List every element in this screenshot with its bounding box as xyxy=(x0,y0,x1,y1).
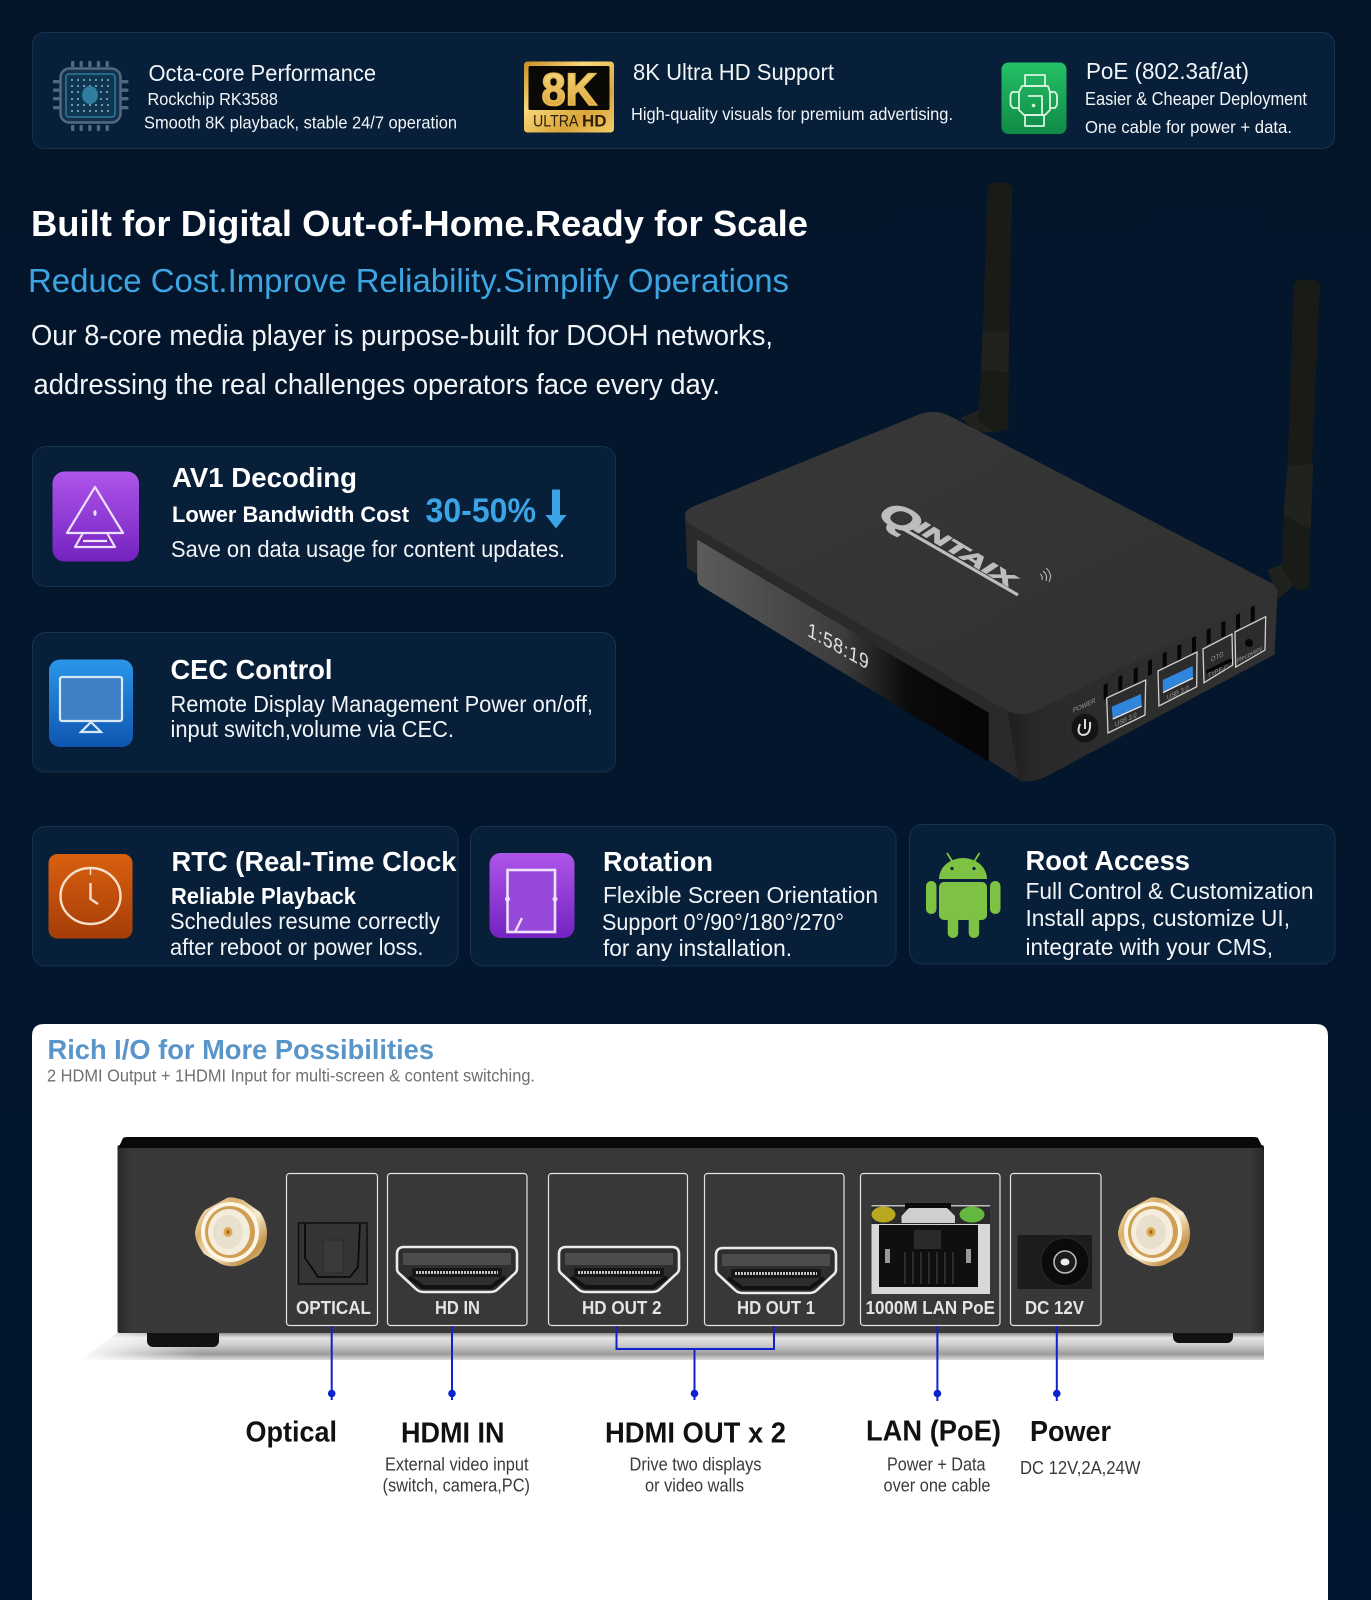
intro text xyxy=(31,320,773,401)
text: CEC copy xyxy=(170,654,593,742)
callout lines xyxy=(328,1326,1061,1401)
product logo: Q xyxy=(867,497,935,540)
antennas xyxy=(960,182,1320,599)
port: LAN PoE: 1000M LAN PoE xyxy=(866,1297,995,1318)
product logo xyxy=(867,497,1050,595)
port: HD OUT 2 xyxy=(548,1174,688,1326)
label: HDMI OUT x 2: HDMI OUT x 2 xyxy=(605,1418,786,1450)
label: power: DC 12V,2A,24W xyxy=(1020,1458,1141,1478)
text: 8K ultra HD support: 8K Ultra HD Support xyxy=(633,59,835,85)
icon: android robot xyxy=(926,853,1000,938)
panel: AV1 decoding xyxy=(32,446,616,586)
label: HDMI IN: External video input xyxy=(385,1454,528,1474)
box: USB 3.0 port 2 xyxy=(1158,652,1197,706)
text: CEC copy: input switch,volume via CEC. xyxy=(170,716,454,742)
text: PoE: PoE (802.3af/at) xyxy=(1086,58,1249,84)
box: power button: POWER xyxy=(1073,697,1096,715)
label: HDMI IN: (switch, camera,PC) xyxy=(382,1476,530,1496)
box: OTG port: OTG xyxy=(1211,651,1224,664)
label: HDMI IN: HDMI IN xyxy=(401,1418,504,1450)
box: vents xyxy=(1104,606,1255,700)
port: HD IN: HD IN xyxy=(435,1297,480,1318)
text: rotation copy: Rotation xyxy=(603,846,713,877)
text: AV1 copy: AV1 Decoding xyxy=(172,462,357,493)
I/O subtitle: 2 HDMI Output + 1HDMI Input for multi-screen & content switching. xyxy=(47,1066,535,1086)
panel: rotation xyxy=(470,826,896,966)
text: root access copy: Install apps, customize UI, xyxy=(1026,905,1290,931)
device rear view xyxy=(78,1137,1264,1361)
box: OTG port xyxy=(1203,634,1233,683)
icon: AV1 triangle xyxy=(52,472,139,562)
icon: 8K Ultra HD badge: ULTRA xyxy=(533,112,579,130)
text: 8K ultra HD support xyxy=(631,59,953,124)
text: rotation copy: Flexible Screen Orientation xyxy=(603,882,878,908)
icon: 8K Ultra HD badge: HD xyxy=(582,112,606,130)
icon: monitor xyxy=(49,660,133,747)
text: PoE xyxy=(1085,58,1307,137)
text: RTC copy xyxy=(170,846,457,960)
text: PoE: Easier & Cheaper Deployment xyxy=(1085,89,1307,109)
panel: Rich I/O xyxy=(32,1024,1328,1600)
box: chassis xyxy=(685,412,1278,782)
text: octa-core performance: Rockchip RK3588 xyxy=(148,89,278,109)
port: optical xyxy=(286,1174,378,1326)
label: LAN PoE xyxy=(866,1416,1001,1496)
label: LAN PoE: over one cable xyxy=(884,1476,990,1496)
box: power button xyxy=(1072,697,1098,742)
text: root access copy: Full Control & Customization xyxy=(1026,878,1314,904)
text: RTC copy: RTC (Real-Time Clock xyxy=(172,846,457,877)
text: rotation copy: for any installation. xyxy=(603,935,792,961)
panel: top feature strip xyxy=(32,32,1334,148)
product photo: media player with antennas xyxy=(685,182,1320,782)
text: root access copy xyxy=(1026,845,1314,960)
port: LAN PoE xyxy=(860,1174,1000,1326)
panel: root access xyxy=(910,824,1335,964)
label: HDMI IN xyxy=(382,1418,530,1496)
box: USB 3.0 port: USB 3.0 xyxy=(1115,712,1137,729)
port: optical: OPTICAL xyxy=(296,1297,371,1318)
box: USB 3.0 port xyxy=(1107,680,1146,733)
box: USB 3.0 port 2: USB 3.0 xyxy=(1167,685,1189,702)
connector: left antenna xyxy=(195,1197,267,1266)
I/O title: Rich I/O for More Possibilities xyxy=(48,1034,434,1065)
port: HD OUT 1 xyxy=(704,1174,844,1326)
icon: rotation frame xyxy=(490,853,574,938)
port: HD OUT 2: HD OUT 2 xyxy=(582,1297,662,1318)
port: DC 12V: DC 12V xyxy=(1025,1297,1085,1318)
arrow: down xyxy=(546,490,566,528)
text: RTC copy: Reliable Playback xyxy=(171,883,356,909)
label: HDMI OUT x 2: or video walls xyxy=(645,1476,744,1496)
panel: CEC control xyxy=(32,632,616,772)
label: LAN PoE: LAN (PoE) xyxy=(866,1416,1001,1448)
text: AV1 copy: Save on data usage for content updates. xyxy=(171,536,565,562)
text: CEC copy: CEC Control xyxy=(170,654,332,685)
port: DC 12V xyxy=(1010,1174,1101,1326)
icon: 8K Ultra HD badge: 8K xyxy=(542,64,597,115)
icon: clock xyxy=(48,854,132,938)
port: HD OUT 1: HD OUT 1 xyxy=(737,1297,815,1318)
subheading: Reduce Cost.Improve Reliability.Simplify Operations xyxy=(28,263,789,300)
text: AV1 copy: Lower Bandwidth Cost xyxy=(172,502,410,527)
label: LAN PoE: Power + Data xyxy=(887,1454,986,1474)
text: root access copy: integrate with your CMS, xyxy=(1026,934,1273,960)
text: CEC copy: Remote Display Management Power on/off, xyxy=(170,691,593,717)
product logo: INTAIX xyxy=(908,518,1024,590)
text: RTC copy: Schedules resume correctly xyxy=(170,908,440,934)
intro text: addressing the real challenges operators face every day. xyxy=(34,369,720,401)
product display clock: 1:58:19 xyxy=(807,619,870,675)
port: HD IN xyxy=(388,1174,527,1326)
icon: 8K Ultra HD badge xyxy=(524,62,614,132)
box: recovery button: Recovery xyxy=(1237,645,1263,665)
icon: processor chip xyxy=(53,61,128,131)
heading: Built for Digital Out-of-Home.Ready for Scale xyxy=(31,203,808,244)
label: HDMI OUT x 2: Drive two displays xyxy=(630,1454,762,1474)
text: 8K ultra HD support: High-quality visuals for premium advertising. xyxy=(631,104,953,124)
stat: 30-50%: 30-50% xyxy=(426,492,536,530)
icon: PoE device xyxy=(1002,62,1066,134)
text: PoE: One cable for power + data. xyxy=(1085,117,1292,137)
text: AV1 copy xyxy=(171,462,565,562)
intro text: Our 8-core media player is purpose-built for DOOH networks, xyxy=(31,320,773,352)
text: RTC copy: after reboot or power loss. xyxy=(170,934,424,960)
text: octa-core performance: Octa-core Performance xyxy=(148,60,376,86)
connector: right antenna xyxy=(1118,1197,1190,1266)
text: rotation copy: Support 0°/90°/180°/270° xyxy=(602,909,844,935)
label: optical: Optical xyxy=(246,1416,337,1448)
label: HDMI OUT x 2 xyxy=(605,1418,786,1496)
text: root access copy: Root Access xyxy=(1026,845,1190,876)
box: OTG port: TYPE-C xyxy=(1208,664,1228,680)
text: octa-core performance: Smooth 8K playback, stable 24/7 operation xyxy=(144,112,457,132)
label: power xyxy=(1020,1416,1141,1478)
text: rotation copy xyxy=(602,846,878,961)
text: octa-core performance xyxy=(144,60,457,132)
panel: RTC xyxy=(32,826,458,966)
box: recovery button xyxy=(1235,617,1266,667)
label: power: Power xyxy=(1030,1416,1111,1448)
